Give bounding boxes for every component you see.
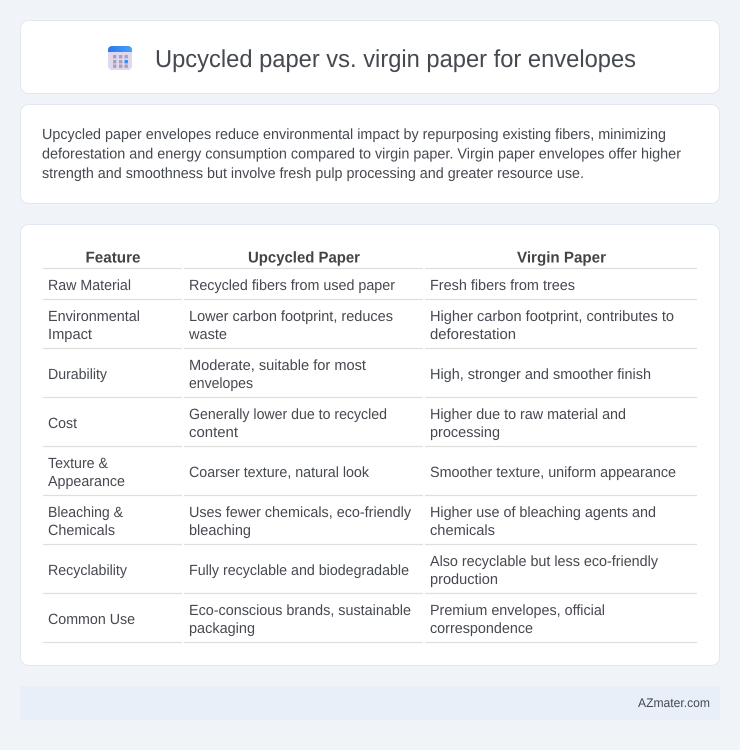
row: recyclability: Recyclability (48, 563, 128, 579)
summary text (42, 127, 681, 182)
row: bleaching and chemicals (48, 505, 656, 539)
footer bar (20, 686, 720, 720)
row: texture and appearance (48, 456, 676, 490)
row: environmental impact: waste (188, 327, 227, 343)
row: texture and appearance: Appearance (48, 474, 125, 490)
row: raw material: Fresh fibers from trees (430, 278, 575, 294)
summary text: strength and smoothness but involve fresh pulp processing and greater resource use. (42, 166, 584, 182)
row: bleaching and chemicals: Chemicals (48, 523, 115, 539)
row: bleaching and chemicals: chemicals (430, 523, 495, 539)
row: bleaching and chemicals: bleaching (189, 523, 251, 539)
row: bleaching and chemicals: Bleaching & (48, 505, 123, 521)
row: cost: Cost (48, 416, 77, 432)
row: environmental impact: Impact (48, 327, 92, 343)
row: cost: Generally lower due to recycled (189, 407, 387, 423)
row: environmental impact: Environmental (48, 309, 140, 325)
row: common use: Eco-conscious brands, sustainable (189, 603, 411, 619)
title: Upcycled paper vs. virgin paper for envelopes (155, 46, 636, 73)
summary text: deforestation and energy consumption compared to virgin paper. Virgin paper envelopes offer higher (42, 146, 681, 162)
table header row: Upcycled Paper (248, 250, 360, 266)
row: common use: packaging (189, 621, 255, 637)
row: raw material (48, 278, 575, 294)
summary card (20, 104, 720, 204)
row: durability: High, stronger and smoother finish (430, 367, 651, 383)
summary text: Upcycled paper envelopes reduce environmental impact by repurposing existing fibers, minimizing (42, 127, 666, 143)
table header row: Feature (86, 250, 141, 266)
icon: calendar (108, 46, 132, 70)
table header row (86, 250, 606, 266)
row: common use: Premium envelopes, official (430, 603, 605, 619)
row: cost: processing (430, 425, 500, 441)
row: recyclability: production (430, 572, 498, 588)
row: durability: envelopes (189, 376, 253, 392)
row: durability: Durability (48, 367, 108, 383)
row: recyclability: Also recyclable but less eco-friendly (430, 554, 659, 570)
row: common use (48, 603, 605, 637)
row: cost: Higher due to raw material and (430, 407, 626, 423)
row: cost: content (189, 425, 238, 441)
row: environmental impact: Lower carbon footprint, reduces (189, 309, 393, 325)
row: durability (48, 358, 651, 392)
row: environmental impact: deforestation (430, 327, 516, 343)
row: bleaching and chemicals: Uses fewer chemicals, eco-friendly (189, 505, 412, 521)
row: bleaching and chemicals: Higher use of bleaching agents and (430, 505, 656, 521)
row: durability: Moderate, suitable for most (189, 358, 366, 374)
table rules (43, 268, 697, 642)
header card (20, 20, 720, 94)
row: common use: correspondence (430, 621, 533, 637)
footer credit: AZmater.com (638, 696, 710, 710)
row: common use: Common Use (48, 612, 135, 628)
row: texture and appearance: Smoother texture, uniform appearance (430, 465, 676, 481)
row: recyclability (48, 554, 659, 588)
row: cost (48, 407, 626, 441)
table header row: Virgin Paper (517, 250, 606, 266)
row: raw material: Raw Material (48, 278, 131, 294)
row: environmental impact: Higher carbon footprint, contributes to (430, 309, 674, 325)
row: texture and appearance: Texture & (48, 456, 108, 472)
row: raw material: Recycled fibers from used paper (189, 278, 395, 294)
comparison table card (20, 224, 720, 666)
row: texture and appearance: Coarser texture, natural look (189, 465, 370, 481)
row: recyclability: Fully recyclable and biodegradable (189, 563, 409, 579)
row: environmental impact (48, 309, 674, 343)
